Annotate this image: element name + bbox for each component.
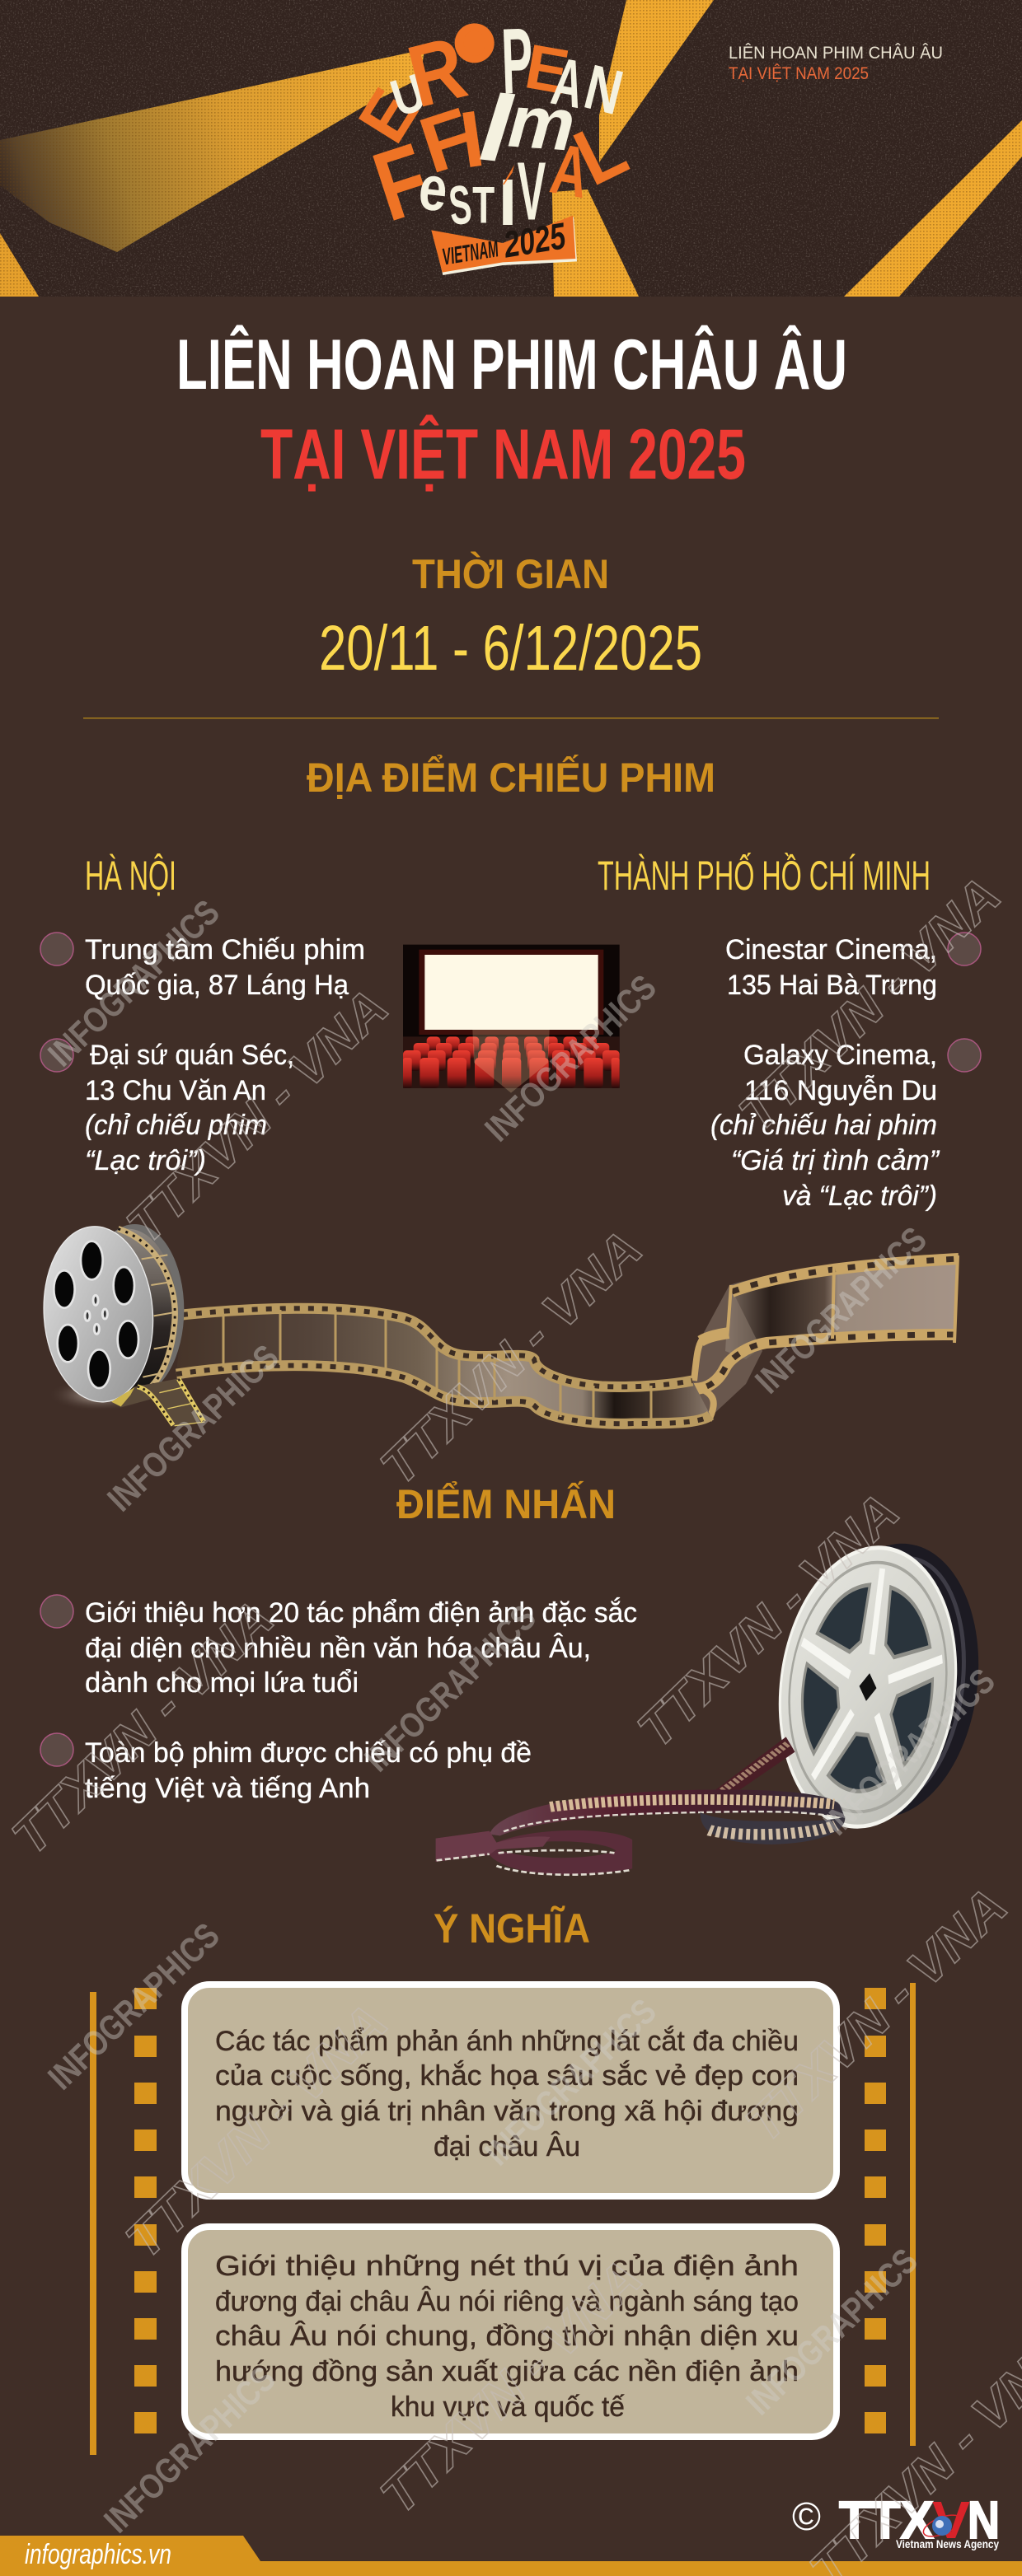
festival logo: L [561,104,640,203]
venue: Cinestar: 135 Hai Bà Trưng [727,970,937,1001]
watermarks: INFOGRAPHICS [41,892,227,1074]
Hanoi heading: HÀ NỘI [85,853,176,899]
film strip frame: left [90,1988,157,2455]
festival logo: S [446,173,475,236]
agency logo: N [968,2490,1000,2550]
festival logo: I [499,166,517,239]
panel: significance box 2: châu Âu nói chung, đồng thời nhận diện xu [215,2321,799,2352]
festival logo: e [415,152,451,225]
watermarks: TTXVN - VNA [370,1220,653,1496]
venue: national cinema [85,934,365,1001]
watermarks: TTXVN - VNA [115,1994,398,2270]
venue: Czech embassy: “Lạc trôi”) [85,1145,206,1176]
festival logo: F [362,124,442,243]
festival logo: O [454,15,495,72]
festival logo [344,8,640,275]
year ribbon [431,214,577,275]
date range: 20/11 - 6/12/2025 [319,613,702,684]
illustration: metal film reel with coil [436,1534,994,1875]
heading: venues: ĐỊA ĐIỂM CHIẾU PHIM [307,755,715,801]
panel: significance box 2: đương đại châu Âu nói riêng và ngành sáng tạo [215,2286,799,2317]
panel: significance box 1 [185,1985,837,2196]
reel face [765,1537,971,1837]
watermarks: INFOGRAPHICS [748,1219,935,1401]
website: infographics.vn [25,2539,171,2570]
festival logo: U [384,63,433,128]
panel: significance box 1: Các tác phẩm phản ánh những lát cắt đa chiều [215,2026,799,2057]
bullet [40,1733,73,1766]
title [176,325,847,494]
venue: Galaxy [710,1040,940,1212]
header banner [0,0,1022,297]
watermarks [2,867,1022,2576]
highlight: subtitles: Toàn bộ phim được chiếu có phụ đề [85,1737,532,1769]
spotlight beams [0,0,1022,297]
watermarks: INFOGRAPHICS [358,1597,544,1779]
header caption [729,44,943,83]
bullet [948,1039,981,1072]
watermarks: INFOGRAPHICS [478,1991,664,2173]
venue: Czech embassy [85,1040,294,1176]
watermarks: TTXVN - VNA [627,1483,910,1759]
agency logo: V [932,2490,970,2550]
venue: Czech embassy: (chỉ chiếu phim [85,1110,267,1141]
panel: Ho Chi Minh City venues [598,852,981,1212]
watermarks: INFOGRAPHICS [478,967,664,1149]
highlight: over 20 films: đại diện cho nhiều nền văn hóa châu Âu, [85,1633,591,1664]
festival logo: l [478,77,516,180]
film coil [436,1737,845,1875]
icon: cinema screen and seats [403,945,620,1093]
reel back [790,1534,994,1827]
festival logo: R [399,17,475,126]
venue: Galaxy: 116 Nguyễn Du [744,1075,937,1106]
highlight: over 20 films [85,1597,637,1699]
film strip frame: right [865,1983,916,2446]
agency logo [792,2490,1000,2550]
venue: Galaxy: Galaxy Cinema, [743,1040,937,1071]
venue: Cinestar [725,934,937,1001]
panel: significance box 2: khu vực và quốc tế [391,2391,625,2423]
highlight: over 20 films: Giới thiệu hơn 20 tác phẩm điện ảnh đặc sắc [85,1597,637,1629]
illustration: film strip [38,1223,959,1427]
watermarks: INFOGRAPHICS [97,2359,284,2541]
panel: Hanoi venues [40,853,365,1176]
strip: back loop [691,1255,959,1420]
panel: significance box 2 [185,2227,837,2437]
festival logo: E [520,31,574,108]
bullet [948,933,981,965]
agency logo: TTX [839,2490,934,2550]
reel: left [38,1223,204,1427]
year ribbon: 2025 [500,214,569,266]
venue: Galaxy: và “Lạc trôi”) [782,1180,937,1212]
watermarks: TTXVN - VNA [370,2249,653,2525]
highlight: subtitles [85,1737,532,1804]
watermarks: TTXVN - VNA [729,867,1011,1143]
header caption: LIÊN HOAN PHIM CHÂU ÂU [729,44,943,63]
footer bar [0,2536,1022,2576]
panel: highlights list [40,1595,637,1804]
venue: national cinema: Quốc gia, 87 Láng Hạ [85,970,349,1001]
festival logo: E [344,76,433,156]
title: TẠI VIỆT NAM 2025 [260,415,746,494]
heading: significance: Ý NGHĨA [434,1905,590,1952]
festival logo: T [472,176,495,234]
festival logo: F [410,91,484,190]
bullet [40,1595,73,1628]
heading: time: THỜI GIAN [412,551,609,597]
venue: Cinestar: Cinestar Cinema, [725,934,937,965]
festival logo: N [578,51,630,129]
festival logo: I [455,94,490,185]
venue: Galaxy: “Giá trị tình cảm” [731,1145,940,1176]
agency logo: © [792,2495,821,2539]
venue: national cinema: Trung tâm Chiếu phim [85,934,365,965]
festival logo: P [499,8,534,114]
panel: significance box 2: hướng đồng sản xuất giữa các nền điện ảnh [215,2356,799,2387]
festival logo: m [506,80,578,167]
watermarks: INFOGRAPHICS [101,1337,287,1519]
bullet [40,1039,73,1072]
heading: highlights: ĐIỂM NHẤN [396,1481,616,1527]
panel: significance box 1: của cuộc sống, khắc họa sâu sắc vẻ đẹp con [215,2060,799,2092]
watermarks: TTXVN - VNA [735,1877,1018,2153]
panel: significance box 1: đại châu Âu [434,2131,580,2162]
panel: significance box 1: người và giá trị nhân văn trong xã hội đương [215,2096,799,2127]
panel: significance box 2: Giới thiệu những nét thú vị của điện ảnh [215,2251,799,2282]
festival logo: A [546,44,589,123]
festival logo: V [518,145,546,237]
strip: main ribbon [176,1308,710,1424]
venue: Galaxy: (chỉ chiếu hai phim [710,1110,937,1141]
header caption: TẠI VIỆT NAM 2025 [729,64,869,83]
watermarks: INFOGRAPHICS [739,2241,926,2423]
festival logo: A [546,128,595,213]
watermarks: INFOGRAPHICS [41,1915,227,2097]
watermarks: TTXVN - VNA [2,1590,284,1866]
year ribbon: VIETNAM [440,236,501,271]
venue: Czech embassy: 13 Chu Văn An [85,1075,266,1106]
highlight: over 20 films: dành cho mọi lứa tuổi [85,1667,359,1699]
bullet [40,933,73,965]
highlight: subtitles: tiếng Việt và tiếng Anh [85,1773,370,1804]
watermarks: TTXVN - VNA [116,979,399,1255]
venue: Czech embassy: Đại sứ quán Séc, [90,1040,294,1071]
agency logo: Vietnam News Agency [896,2537,999,2550]
